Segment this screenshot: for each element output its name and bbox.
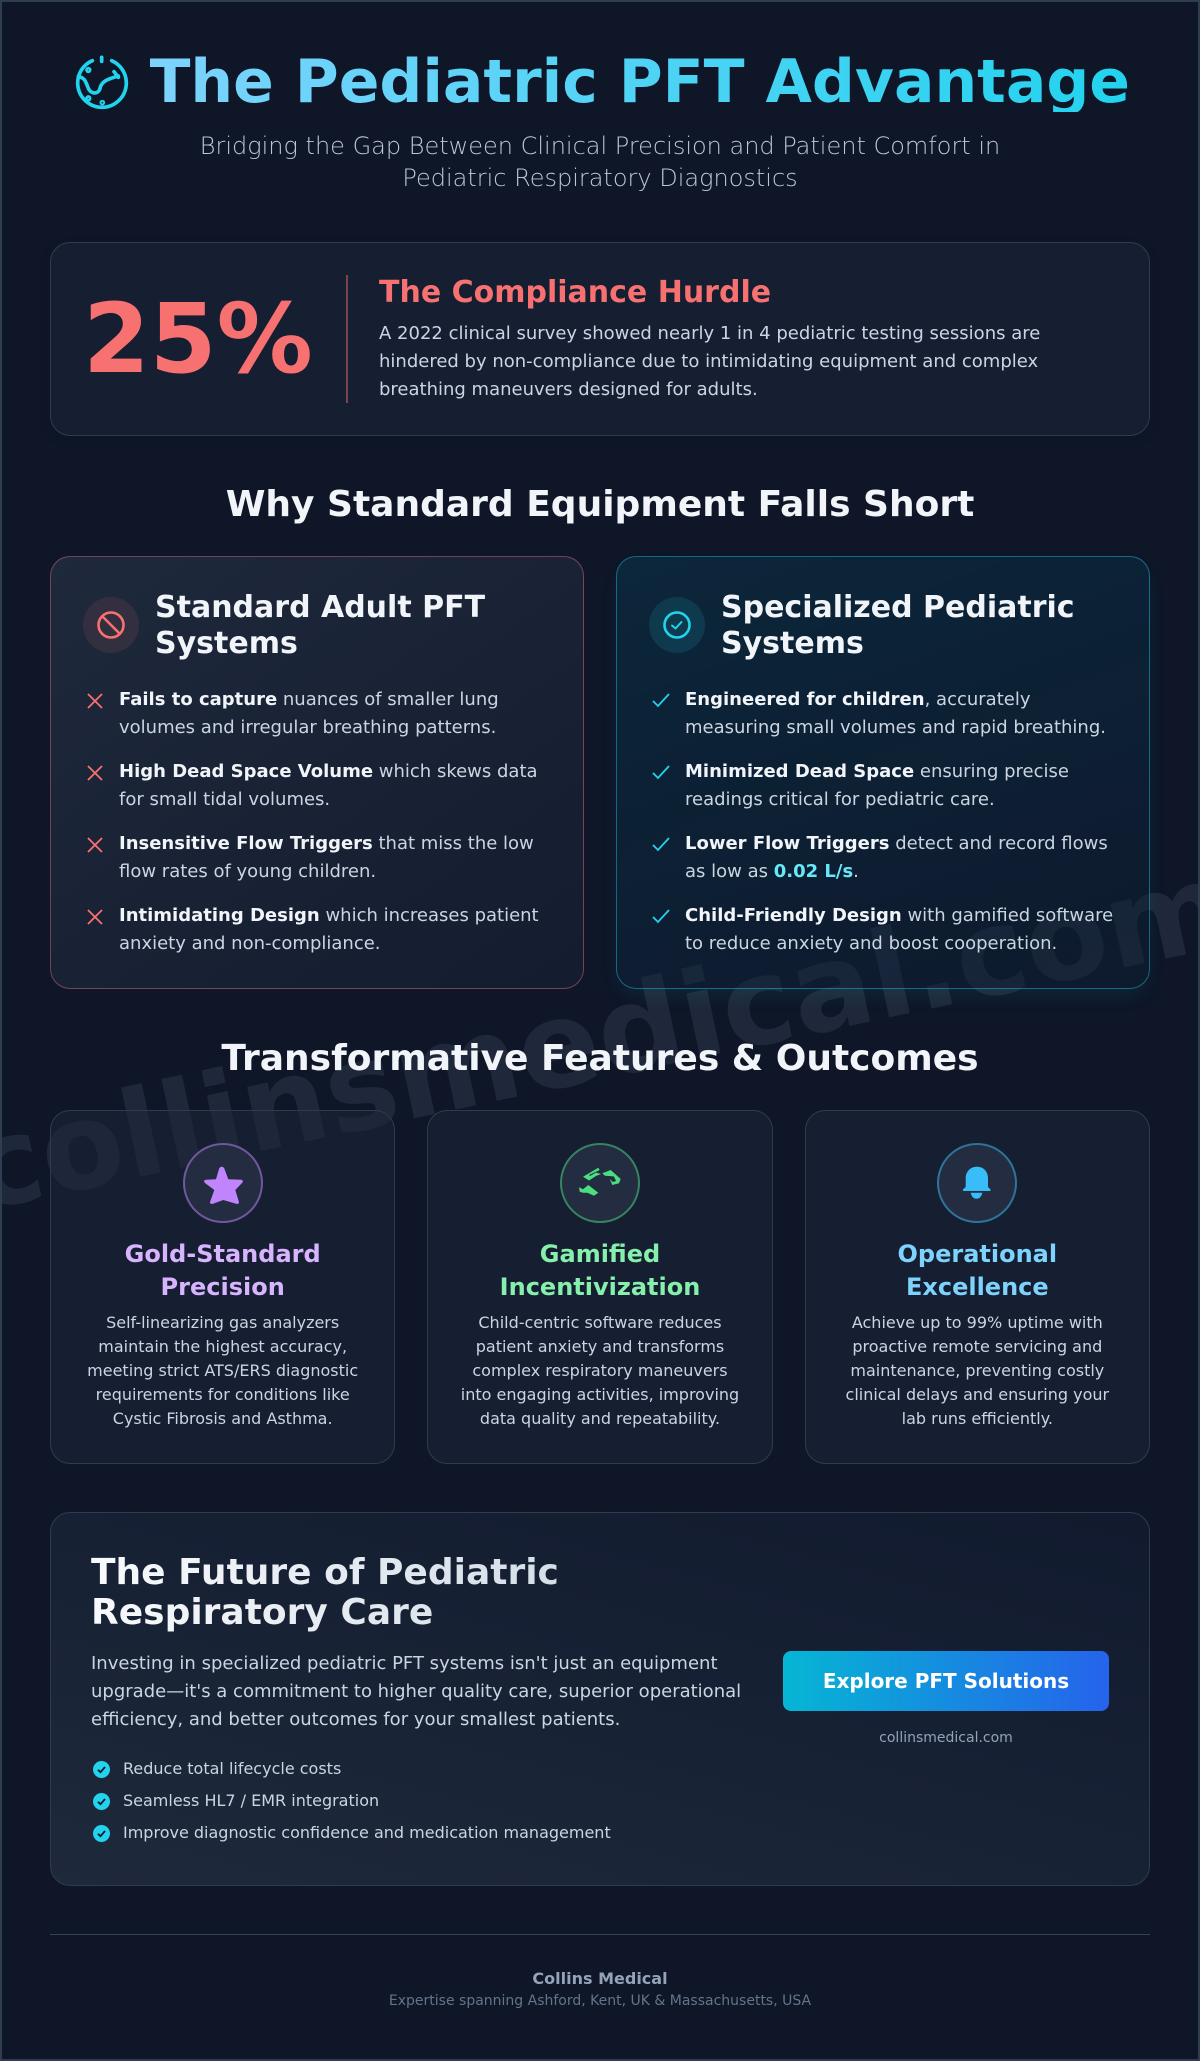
- heading: Excellence: [906, 1272, 1049, 1300]
- heading: Precision: [161, 1272, 285, 1300]
- subtitle: [200, 132, 1000, 192]
- text: compliance description: [379, 323, 1040, 400]
- footer divider: [50, 1934, 1150, 1935]
- text: investment statement: upgrade—it's a commitment to higher quality care, superior operational: [91, 1681, 741, 1702]
- website link: collinsmedical.com: [879, 1730, 1013, 1746]
- text: investment statement: efficiency, and better outcomes for your smallest patients.: [91, 1709, 620, 1730]
- benefit: lifecycle costs: Reduce total lifecycle costs: [123, 1759, 341, 1778]
- icon: bell: [937, 1143, 1017, 1223]
- heading: future of pediatric care: Respiratory Care: [91, 1592, 433, 1633]
- description: [87, 1313, 358, 1428]
- list item: flow triggers: [87, 833, 534, 882]
- panel: specialized pediatric systems: [616, 556, 1150, 989]
- list item: engineered: Engineered for children, accurately: [685, 689, 1030, 710]
- heading: Operational: [898, 1240, 1057, 1268]
- list item: flow triggers: flow rates of young children.: [119, 861, 376, 882]
- list item: intimidating design: Intimidating Design which increases patient: [119, 905, 539, 926]
- description: Self-linearizing gas analyzers: [106, 1313, 339, 1332]
- text: investment statement: [91, 1653, 741, 1730]
- list item: dead space: [87, 761, 538, 810]
- heading: specialized pediatric: Specialized Pediatric: [721, 590, 1075, 625]
- heading: future of pediatric care: The Future of Pediatric: [91, 1552, 559, 1593]
- heading: standard adult: Standard Adult PFT: [155, 590, 485, 625]
- heading: Gold-Standard: [125, 1240, 321, 1268]
- heading: standard adult: [155, 590, 485, 661]
- list item: fails to capture: Fails to capture nuances of smaller lung: [119, 689, 499, 710]
- description: complex respiratory maneuvers: [472, 1361, 728, 1380]
- text: compliance description: hindered by non-compliance due to intimidating equipment and complex: [379, 351, 1038, 372]
- description: clinical delays and ensuring your: [846, 1385, 1109, 1404]
- description: into engaging activities, improving: [461, 1385, 739, 1404]
- list item: child-friendly design: to reduce anxiety and boost cooperation.: [685, 933, 1057, 954]
- heading: standard adult: Systems: [155, 626, 298, 661]
- list item: minimized dead space: Minimized Dead Space ensuring precise: [685, 761, 1069, 782]
- description: [846, 1313, 1110, 1428]
- heading: Incentivization: [500, 1272, 700, 1300]
- icon: prohibited: [83, 597, 139, 653]
- list item: intimidating design: anxiety and non-compliance.: [119, 933, 381, 954]
- list item: dead space: High Dead Space Volume which skews data: [119, 761, 538, 782]
- benefit: integration: Seamless HL7 / EMR integration: [123, 1791, 379, 1810]
- description: proactive remote servicing and: [852, 1337, 1102, 1356]
- heading: future of pediatric care: [91, 1553, 559, 1633]
- description: [461, 1313, 739, 1428]
- panel: gamified incentivization: [427, 1110, 773, 1464]
- panel: gold-standard precision: [50, 1110, 395, 1464]
- big stat: 25%: 25%: [83, 283, 313, 395]
- list item: child-friendly design: [652, 905, 1113, 954]
- heading: compliance hurdle: The Compliance Hurdle: [379, 275, 771, 310]
- footer: locations: Expertise spanning Ashford, Kent, UK & Massachusetts, USA: [389, 1993, 811, 2009]
- list item: child-friendly design: Child-Friendly Design with gamified software: [685, 905, 1113, 926]
- description: Achieve up to 99% uptime with: [852, 1313, 1103, 1332]
- panel: compliance hurdle: [50, 242, 1150, 436]
- panel: standard adult PFT systems: [50, 556, 584, 989]
- description: Cystic Fibrosis and Asthma.: [113, 1409, 333, 1428]
- list item: minimized dead space: [652, 761, 1069, 810]
- panel: call to action: [50, 1512, 1150, 1886]
- icon: handshake: [560, 1143, 640, 1223]
- description: data quality and repeatability.: [480, 1409, 720, 1428]
- description: lab runs efficiently.: [902, 1409, 1053, 1428]
- list item: intimidating design: [87, 905, 539, 954]
- text: investment statement: Investing in specialized pediatric PFT systems isn't just an equipment: [91, 1653, 718, 1674]
- list item: fails to capture: [87, 689, 499, 738]
- panel: operational excellence: [805, 1110, 1150, 1464]
- list item: lower flow triggers: Lower Flow Triggers detect and record flows: [685, 833, 1108, 854]
- text: compliance description: breathing maneuvers designed for adults.: [379, 379, 758, 400]
- subtitle: Bridging the Gap Between Clinical Precision and Patient Comfort in: [200, 132, 1000, 160]
- heading: specialized pediatric: Systems: [721, 626, 864, 661]
- icon: check circle: [649, 597, 705, 653]
- description: patient anxiety and transforms: [476, 1337, 724, 1356]
- benefit: diagnostic confidence: Improve diagnostic confidence and medication management: [123, 1823, 611, 1842]
- list item: engineered: measuring small volumes and rapid breathing.: [685, 717, 1106, 738]
- description: meeting strict ATS/ERS diagnostic: [87, 1361, 358, 1380]
- subtitle: Pediatric Respiratory Diagnostics: [402, 164, 798, 192]
- description: maintain the highest accuracy,: [98, 1337, 347, 1356]
- list item: lower flow triggers: [652, 833, 1108, 882]
- list item: minimized dead space: readings critical for pediatric care.: [685, 789, 995, 810]
- list item: fails to capture: volumes and irregular breathing patterns.: [119, 717, 496, 738]
- heading: transformative features: Transformative Features & Outcomes: [221, 1038, 979, 1079]
- description: Child-centric software reduces: [478, 1313, 722, 1332]
- title: The Pediatric PFT Advantage: [150, 47, 1130, 117]
- list item: lower flow triggers: as low as 0.02 L/s.: [685, 861, 859, 882]
- heading: why standard equipment falls short: Why Standard Equipment Falls Short: [226, 484, 974, 525]
- heading: [898, 1240, 1057, 1300]
- heading: specialized pediatric: [721, 590, 1075, 661]
- footer: company name: Collins Medical: [532, 1969, 668, 1988]
- text: compliance description: A 2022 clinical survey showed nearly 1 in 4 pediatric testing sessions are: [379, 323, 1040, 344]
- heading: [125, 1240, 321, 1300]
- list item: flow triggers: Insensitive Flow Triggers that miss the low: [119, 833, 534, 854]
- description: maintenance, preventing costly: [850, 1361, 1104, 1380]
- heading: Gamified: [540, 1240, 660, 1268]
- list item: engineered: [652, 689, 1106, 738]
- heading: [500, 1240, 700, 1300]
- icon: lungs in circle: [76, 56, 128, 110]
- stat divider: [346, 275, 348, 403]
- icon: star: [183, 1143, 263, 1223]
- description: requirements for conditions like: [96, 1385, 350, 1404]
- button: explore solutions: Explore PFT Solutions: [823, 1669, 1069, 1693]
- button: explore solutions: [783, 1651, 1109, 1711]
- list item: dead space: for small tidal volumes.: [119, 789, 330, 810]
